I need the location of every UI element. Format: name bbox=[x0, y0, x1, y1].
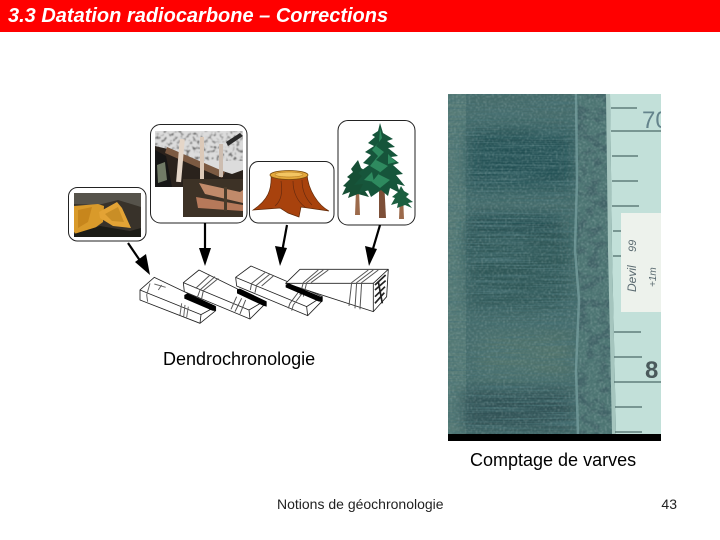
footer: page number: 43 bbox=[661, 496, 677, 512]
title: 3.3 Datation radiocarbone – Corrections bbox=[8, 5, 388, 27]
photo: old timber frame bbox=[155, 131, 243, 187]
photo: cut timber logs bbox=[183, 179, 243, 217]
sediment core bbox=[448, 94, 669, 434]
ruler ticks bbox=[611, 108, 661, 432]
icon: stump trunk bbox=[253, 174, 329, 217]
core base band bbox=[448, 434, 661, 441]
photo: golden wood fragments bbox=[74, 193, 141, 237]
arrow: wood fragment to log bbox=[128, 243, 150, 275]
ruler label: +1m bbox=[648, 267, 659, 287]
ruler label bbox=[621, 213, 661, 312]
log section 1 bbox=[140, 277, 216, 323]
arrow: tree to log bbox=[365, 225, 380, 266]
ruler label: Devil bbox=[625, 265, 639, 292]
ruler numbers: 70 bbox=[642, 107, 669, 134]
icon: stump top bbox=[270, 170, 308, 180]
sediment core: 8 bbox=[645, 357, 658, 384]
caption: dendrochronology: Dendrochronologie bbox=[163, 349, 315, 369]
ruler bbox=[610, 94, 661, 434]
dated overlap bands bbox=[184, 283, 322, 311]
title bar bbox=[0, 0, 720, 32]
log section 3 bbox=[236, 266, 322, 316]
caption: varve counting: Comptage de varves bbox=[470, 450, 636, 470]
icon: tall central tree bbox=[354, 123, 405, 218]
ruler label: 99 bbox=[627, 240, 639, 252]
icon: right small tree bbox=[391, 186, 413, 219]
panel: conifer trees bbox=[338, 120, 415, 225]
log section 4 bbox=[286, 269, 388, 312]
log section 2 bbox=[183, 270, 263, 319]
diagram: overlapping tree-ring log sections bbox=[140, 266, 388, 323]
illustration layer bbox=[68, 94, 661, 441]
arrow: stump to log bbox=[275, 225, 287, 266]
footer: course name: Notions de géochronologie bbox=[277, 496, 444, 512]
stump bark lines bbox=[275, 180, 312, 207]
panel: timber structure photos bbox=[150, 124, 247, 223]
icon: left small tree bbox=[342, 160, 371, 215]
panel: tree stump bbox=[250, 162, 334, 223]
arrow: timber to log bbox=[199, 223, 211, 266]
panel: wood fragment photo bbox=[68, 188, 146, 241]
photo: varved sediment core with ruler bbox=[448, 94, 669, 441]
